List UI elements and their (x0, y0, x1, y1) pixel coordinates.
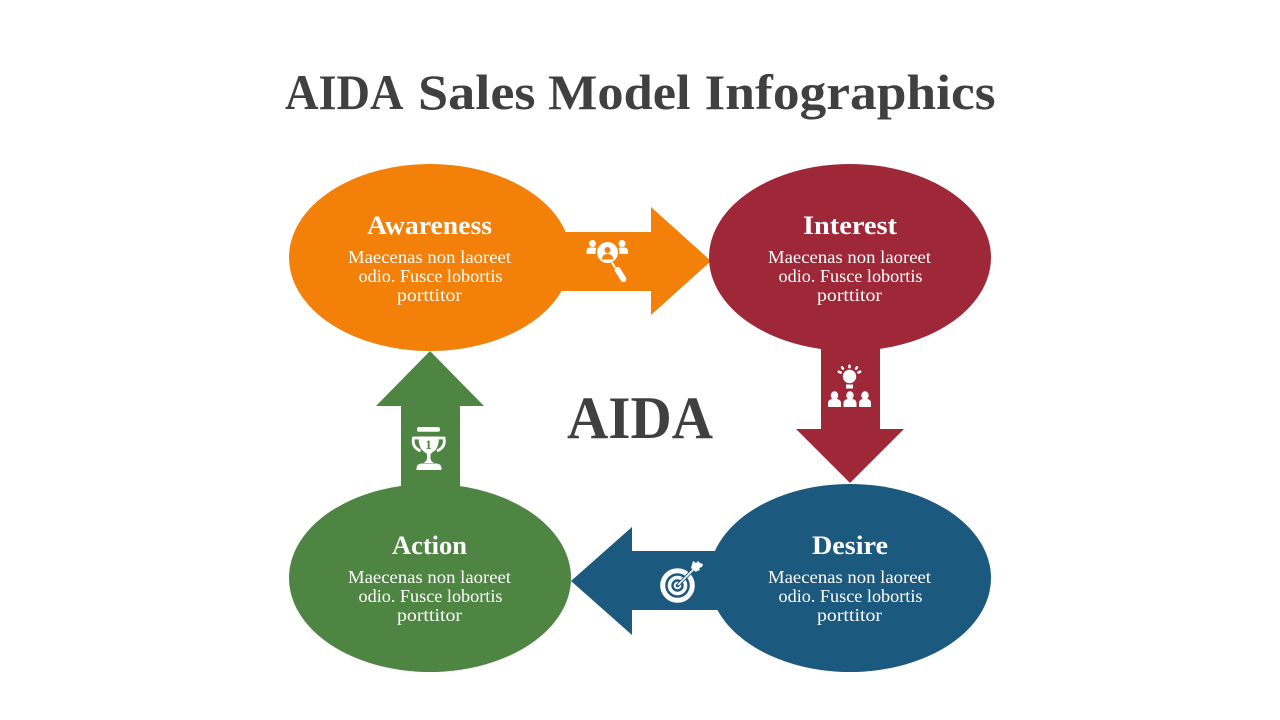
panel: action (289, 484, 571, 672)
heading: awareness: Awareness (367, 211, 492, 240)
text block: awareness: Maecenas non laoreet (348, 247, 511, 267)
icon: lightbulb and team (828, 364, 871, 407)
text block: action (348, 567, 511, 625)
text block: desire (768, 567, 931, 625)
text block: awareness: odio. Fusce lobortis (358, 266, 503, 286)
text block: interest: Maecenas non laoreet (768, 247, 931, 267)
arrow: action to awareness (376, 351, 484, 495)
text block: awareness: porttitor (397, 285, 462, 305)
panel: awareness (289, 164, 571, 351)
text block: interest (768, 247, 931, 305)
text block: desire: odio. Fusce lobortis (778, 586, 923, 606)
text block: interest: odio. Fusce lobortis (778, 266, 923, 286)
text block: desire: Maecenas non laoreet (768, 567, 931, 587)
icon: trophy: 1 (425, 437, 432, 452)
arrow: interest to desire (796, 340, 904, 483)
heading: interest: Interest (803, 211, 897, 240)
title: AIDA (285, 64, 404, 120)
icon: people search (586, 240, 628, 283)
center label: AIDA (567, 385, 713, 451)
icon: dart target (663, 561, 703, 600)
text block: action: odio. Fusce lobortis (358, 586, 503, 606)
panel: interest (709, 164, 991, 351)
arrow: awareness to interest (555, 207, 711, 315)
arrow: desire to action (571, 527, 725, 635)
title (285, 64, 996, 120)
heading: desire: Desire (812, 531, 888, 560)
text block: awareness (348, 247, 511, 305)
icon: trophy (413, 427, 444, 470)
text block: action: porttitor (397, 605, 462, 625)
text block: action: Maecenas non laoreet (348, 567, 511, 587)
title: Infographics (704, 64, 996, 120)
panel: desire (709, 484, 991, 672)
title: Sales (418, 64, 536, 120)
title: Model (548, 64, 691, 120)
text block: desire: porttitor (817, 605, 882, 625)
heading: action: Action (392, 531, 468, 560)
text block: interest: porttitor (817, 285, 882, 305)
